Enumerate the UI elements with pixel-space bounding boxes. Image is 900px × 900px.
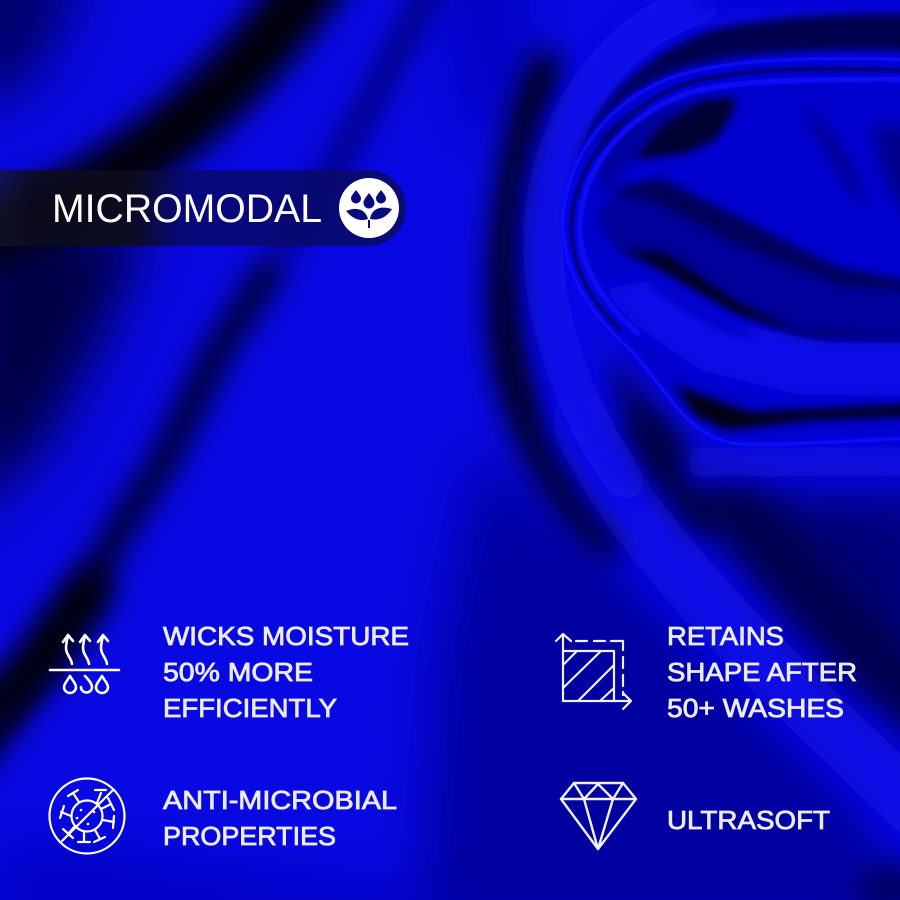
feature: anti-microbial [50, 778, 397, 854]
dark wedge under lower band [675, 385, 900, 430]
swirl [575, 13, 900, 175]
heading: MICROMODAL [52, 187, 322, 231]
feature: ultrasoft [561, 783, 830, 849]
dark pocket [633, 97, 735, 160]
inner lobe [630, 85, 900, 340]
text: wicks moisture: EFFICIENTLY [163, 693, 337, 723]
icon: moisture wicking [50, 635, 119, 693]
mid diagonal crease [285, 0, 440, 245]
text: retains shape: 50+ WASHES [667, 693, 844, 723]
thin highlights [563, 59, 900, 444]
icon: diamond [561, 783, 636, 849]
bright band F [580, 420, 900, 850]
text: retains shape: SHAPE AFTER [667, 657, 857, 687]
text: anti-microbial: PROPERTIES [163, 821, 336, 851]
dark crease upper left [0, 0, 320, 240]
crease right of band F [730, 500, 900, 730]
badge: micromodal [0, 170, 406, 246]
lower lobe [595, 180, 900, 340]
text: ultrasoft: ULTRASOFT [667, 805, 830, 835]
text: wicks moisture: 50% MORE [163, 657, 313, 687]
text: wicks moisture: WICKS MOISTURE [163, 621, 409, 651]
text: retains shape: RETAINS [667, 621, 784, 651]
icon: drops and leaves [339, 178, 399, 238]
lower bright band [600, 280, 900, 395]
feature: wicks moisture [50, 621, 409, 723]
outer fold [543, 4, 700, 480]
text: anti-microbial: ANTI-MICROBIAL [163, 785, 397, 815]
icon: crossed virus [50, 778, 124, 854]
feature: retains shape [556, 621, 857, 723]
badge bar [0, 170, 406, 246]
right edge dark [507, 70, 610, 540]
icon: shape square [556, 634, 631, 709]
